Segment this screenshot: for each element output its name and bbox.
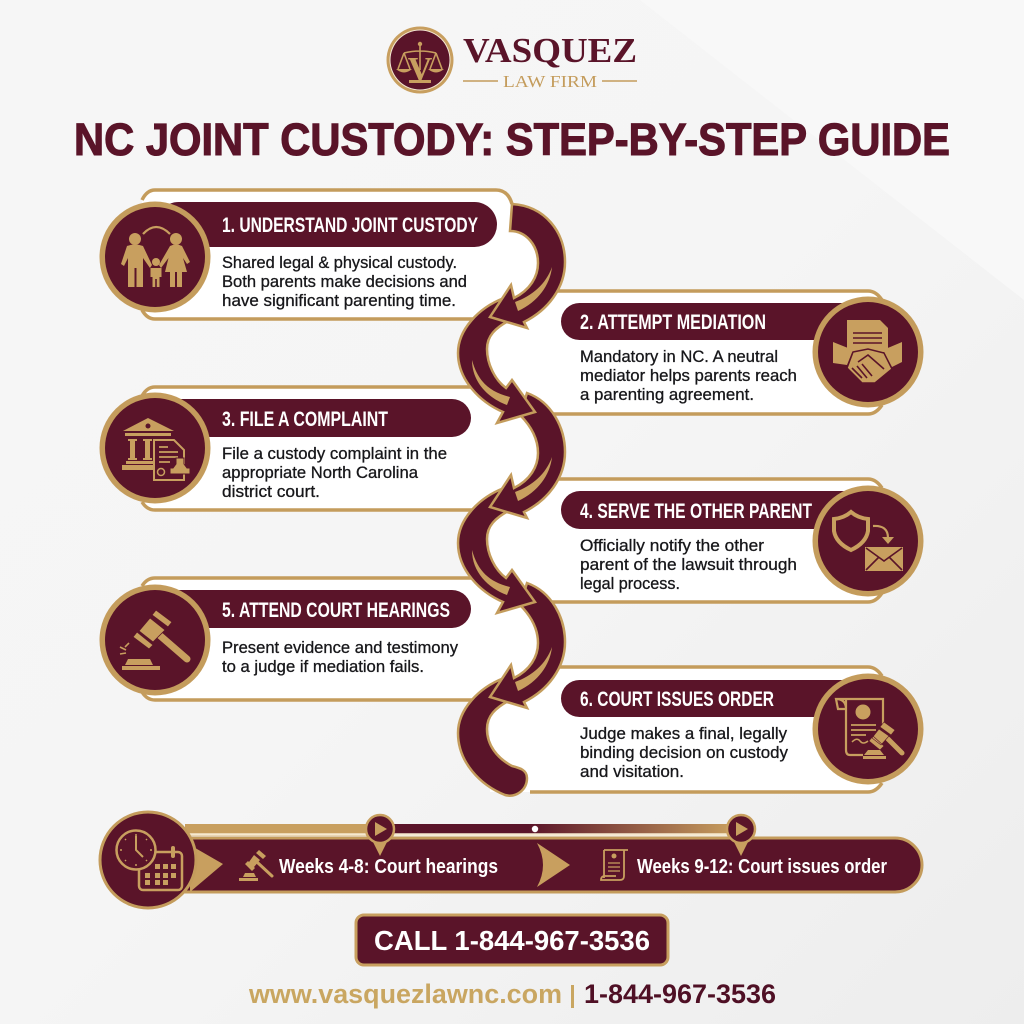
step 2 body text: a parenting agreement.: [580, 386, 754, 404]
step 2 header: [561, 303, 861, 340]
step 1 body text: have significant parenting time.: [222, 292, 456, 310]
icon: family: [100, 202, 210, 312]
timeline text 2: Weeks 9-12: Court issues order: [637, 856, 887, 878]
logo emblem: V: [408, 51, 433, 88]
step 3 body text: File a custody complaint in the: [222, 445, 447, 463]
step 5 body text: Present evidence and testimony: [222, 639, 459, 657]
step 2 body text: [580, 348, 797, 404]
timeline bar: [100, 812, 922, 908]
icon: shield and envelope: [812, 486, 924, 596]
step 3 header: [156, 399, 471, 437]
step 2 body text: mediator helps parents reach: [580, 367, 797, 385]
footer contact line: 1-844-967-3536: [584, 979, 776, 1009]
icon: small scroll: [601, 850, 628, 880]
step 6 body text: binding decision on custody: [580, 744, 789, 762]
step 5: [100, 584, 471, 696]
icon: gavel: [100, 584, 210, 696]
step 3: [100, 392, 471, 504]
step 1 body text: Both parents make decisions and: [222, 273, 467, 291]
timeline pin marker 2: [727, 815, 755, 856]
step 4: [561, 486, 924, 596]
timeline pin marker 1: [366, 815, 394, 856]
step 3 body text: appropriate North Carolina: [222, 464, 419, 482]
step 4 header: 4. SERVE THE OTHER PARENT: [580, 500, 812, 523]
step 2 body text: Mandatory in NC. A neutral: [580, 348, 778, 366]
footer contact line: www.vasquezlawnc.com: [248, 979, 562, 1009]
step 4 body text: legal process.: [580, 575, 680, 593]
step 1 body text: [222, 254, 467, 310]
panel backgrounds: even steps: [490, 291, 882, 792]
step 3 body text: [222, 445, 447, 501]
step 6 header: 6. COURT ISSUES ORDER: [580, 688, 774, 711]
footer contact line: [248, 979, 776, 1009]
step 6: [561, 674, 924, 784]
step 1 header: 1. UNDERSTAND JOINT CUSTODY: [222, 214, 478, 237]
logo emblem: [386, 26, 454, 94]
panel backgrounds: odd steps: [142, 190, 540, 700]
call to action button: CALL 1-844-967-3536: [374, 925, 650, 956]
step 6 body text: Judge makes a final, legally: [580, 725, 788, 743]
step 4 body text: parent of the lawsuit through: [580, 556, 797, 574]
step 6 body text: and visitation.: [580, 763, 684, 781]
arrow: step 5 to 6: [490, 583, 565, 708]
icon: clock and calendar: [100, 812, 196, 908]
chevron 2: [537, 843, 570, 887]
step 3 header: 3. FILE A COMPLAINT: [222, 408, 388, 431]
step 5 body text: [222, 639, 459, 676]
icon: courthouse and complaint: [100, 392, 210, 504]
arrow tail: final curve: [458, 678, 527, 796]
arrow: step 4 to 5: [458, 488, 535, 613]
step 1 header: [156, 202, 497, 247]
timeline progress track: [185, 824, 735, 836]
step 3 body text: district court.: [222, 483, 320, 501]
call to action button: [356, 915, 668, 965]
step 1: [100, 202, 497, 312]
step 4 body text: Officially notify the other: [580, 537, 765, 555]
arrow: step 2 to 3: [458, 298, 535, 423]
step 5 header: 5. ATTEND COURT HEARINGS: [222, 599, 450, 622]
logo wordmark: VASQUEZ: [463, 31, 637, 70]
logo subtitle: LAW FIRM: [503, 72, 597, 91]
arrow: step 1 to 2: [490, 204, 565, 328]
step 6 body text: [580, 725, 789, 781]
title: NC JOINT CUSTODY: STEP-BY-STEP GUIDE: [74, 114, 950, 165]
serpentine connector arrows: [458, 204, 565, 796]
logo: [386, 26, 637, 94]
timeline text 1: Weeks 4-8: Court hearings: [279, 856, 498, 878]
step 6 header: [561, 680, 861, 717]
icon: court order scroll and gavel: [812, 674, 924, 784]
icon: small gavel: [239, 850, 272, 881]
timeline band: [150, 838, 922, 892]
chevron 1: [190, 845, 223, 892]
step 5 header: [156, 590, 471, 628]
step 4 header: [561, 491, 861, 529]
step 2: [561, 296, 924, 408]
step 1 body text: Shared legal & physical custody.: [222, 254, 457, 272]
step 5 body text: to a judge if mediation fails.: [222, 658, 424, 676]
icon: handshake and document: [812, 296, 924, 408]
arrow: step 3 to 4: [490, 393, 565, 518]
step 2 header: 2. ATTEMPT MEDIATION: [580, 311, 766, 334]
step 4 body text: [580, 537, 797, 593]
